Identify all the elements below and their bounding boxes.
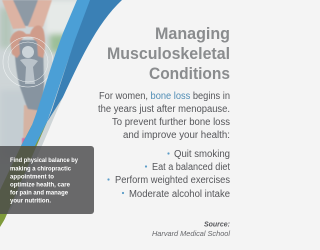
tip: balanced diet: Eat a balanced diet <box>152 162 230 173</box>
intro paragraph <box>98 91 230 141</box>
white-grey content area <box>0 0 250 250</box>
hands <box>10 25 45 58</box>
callout text: your nutrition. <box>10 197 51 204</box>
green curved band <box>0 122 47 230</box>
tip: weighted exercises: Perform weighted exercises <box>115 175 230 186</box>
callout text: Find physical balance by <box>10 157 79 164</box>
callout text <box>10 157 79 204</box>
arms <box>2 0 26 29</box>
tip: alcohol intake: Moderate alcohol intake <box>129 189 230 200</box>
photo: runner holding knee <box>0 0 77 156</box>
intro paragraph: and improve your health: <box>123 130 230 141</box>
intro paragraph: the years just after menopause. <box>98 104 230 115</box>
intro paragraph: To prevent further bone loss <box>112 117 230 128</box>
callout text: for pain and manage <box>10 189 69 196</box>
callout text: optimize health, care <box>10 181 71 188</box>
title: Musculoskeletal <box>107 44 230 63</box>
page background <box>0 0 250 250</box>
shorts on thigh <box>12 0 38 26</box>
pink shoe <box>22 138 25 144</box>
infographic canvas <box>0 0 230 238</box>
source heading: Source: <box>204 220 230 228</box>
health tips list <box>115 149 230 200</box>
callout box <box>0 146 94 214</box>
list bullets <box>107 152 170 194</box>
title: Conditions <box>149 64 230 83</box>
title: Managing <box>155 24 230 43</box>
glowing knee joint <box>3 37 53 87</box>
dark blue curved band <box>47 0 124 122</box>
leg in leggings <box>15 40 44 111</box>
intro paragraph: For women, bone loss begins in <box>99 91 230 102</box>
light blue curved band <box>21 0 92 146</box>
title <box>107 24 230 83</box>
calf <box>22 104 38 138</box>
callout text: appointment to <box>10 173 54 180</box>
callout text: making a chiropractic <box>10 165 72 172</box>
tip: quit smoking: Quit smoking <box>174 149 230 160</box>
source name: Harvard Medical School <box>152 229 230 238</box>
